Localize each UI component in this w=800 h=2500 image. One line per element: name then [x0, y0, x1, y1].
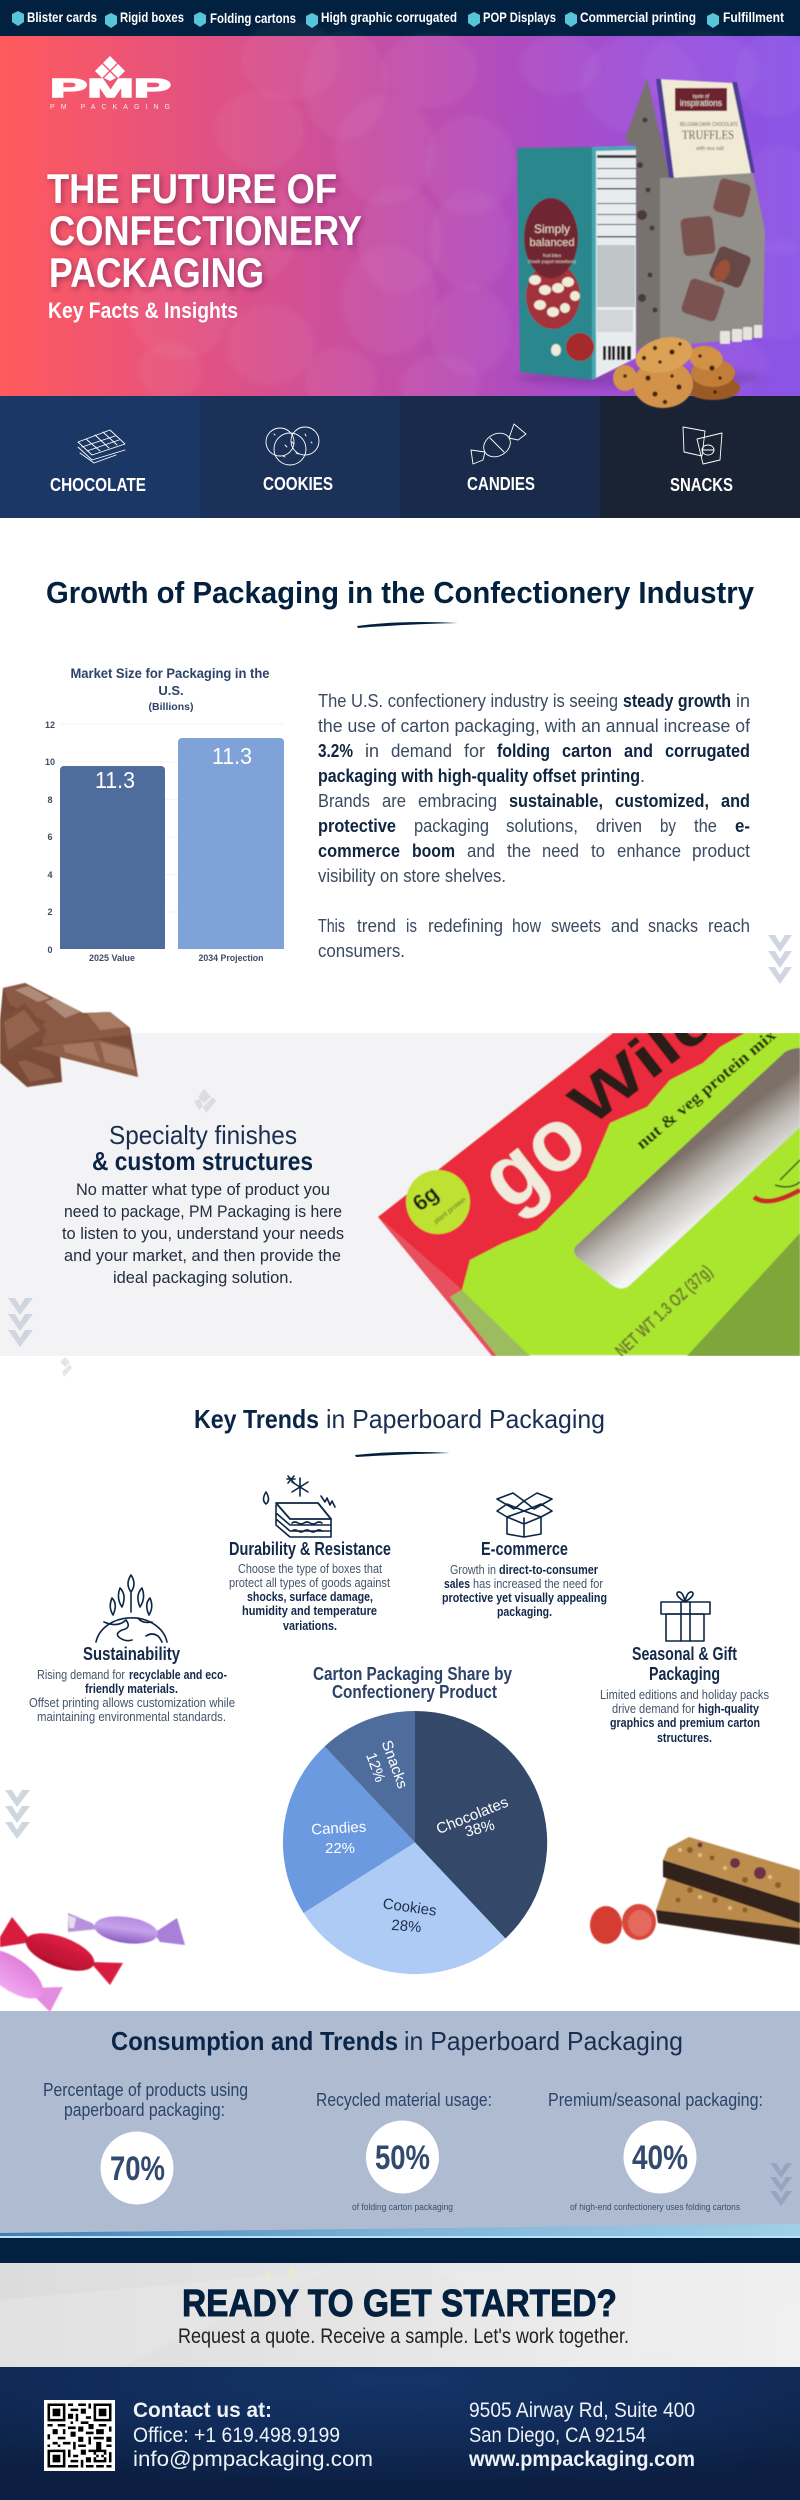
- hero background: [0, 20, 800, 415]
- truffles box: with sea salt: [696, 146, 724, 152]
- chart title: (Billions): [149, 701, 193, 713]
- cta heading: READY TO GET STARTED?: [182, 2283, 617, 2325]
- growth paragraph: redefining: [428, 916, 503, 936]
- swoosh divider: [0, 2224, 800, 2263]
- simply balanced box: Simply: [534, 222, 570, 236]
- bar labels: [89, 953, 264, 963]
- e-commerce copy: [442, 1562, 607, 1619]
- product image: go wild box: 6g: [408, 1180, 443, 1216]
- bar labels: 2025 Value: [89, 953, 135, 963]
- slice: cookies 28%: Cookies: [382, 1895, 438, 1920]
- sustainability copy: Offset printing allows customization while: [29, 1695, 235, 1710]
- trend: sustainability: [29, 1575, 235, 1724]
- growth paragraph: This: [318, 916, 345, 936]
- sustainability copy: friendly materials.: [85, 1681, 178, 1696]
- truffles box: TRUFFLES: [682, 127, 734, 142]
- service: rigid boxes: Rigid boxes: [120, 9, 184, 25]
- service: commercial printing: [565, 9, 696, 27]
- heading: specialty finishes: [92, 1120, 313, 1176]
- slice: candies 22%: [283, 1746, 415, 1913]
- service: blister cards: [12, 9, 97, 26]
- hero title: [47, 165, 362, 296]
- growth paragraph: the: [507, 841, 531, 861]
- service: high graphic corrugated: High graphic corrugated: [321, 9, 457, 25]
- service: POP displays: POP Displays: [483, 9, 556, 25]
- sustainability copy: maintaining environmental standards.: [37, 1709, 226, 1724]
- axis labels: 4: [47, 870, 53, 880]
- stat: 70%: paperboard packaging:: [64, 2100, 225, 2120]
- tile: candies: [400, 396, 600, 518]
- slice: candies 22%: Candies: [311, 1819, 367, 1838]
- panel: consumption and trends: [0, 2011, 800, 2237]
- e-commerce copy: has increased the need for: [473, 1576, 604, 1591]
- axis labels: 8: [47, 795, 53, 805]
- growth paragraph: Brands: [318, 791, 370, 811]
- bar: 2034 projection: [178, 738, 284, 949]
- simply balanced box: [517, 146, 636, 380]
- growth paragraph: product: [692, 841, 750, 861]
- growth paragraph: demand: [391, 741, 452, 761]
- durability copy: humidity and temperature: [242, 1603, 377, 1618]
- growth paragraph: the use of carton packaging, with an annual increase of: [318, 716, 751, 736]
- axis labels: 10: [45, 757, 55, 767]
- growth paragraph: sweets: [551, 916, 601, 936]
- paragraph: specialty finishes: [62, 1180, 344, 1287]
- chevrons: specialty section: [8, 1298, 33, 1347]
- product image: go wild box: NET WT 1.3 OZ (37g): [611, 1261, 716, 1361]
- truffles box: inspirations: [680, 98, 722, 108]
- growth paragraph: steady growth: [623, 691, 731, 711]
- bar: 2025 value: [60, 766, 165, 949]
- e-commerce copy: protective yet visually appealing: [442, 1590, 607, 1605]
- section heading: key trends: Key Trends: [194, 1404, 319, 1434]
- faint diamond mark: [60, 1357, 72, 1377]
- service: fulfillment: Fulfillment: [723, 9, 784, 25]
- durability copy: [229, 1561, 390, 1633]
- section heading: growth of packaging: [46, 575, 755, 628]
- growth paragraph: [318, 691, 751, 961]
- hero subtitle: Key Facts & Insights: [48, 298, 238, 323]
- chevrons: consumption section: [770, 2163, 792, 2206]
- trend: e-commerce: [442, 1493, 607, 1619]
- contact details: [133, 2399, 373, 2471]
- growth paragraph: visibility on store shelves.: [318, 866, 506, 886]
- heading: consumption and trends: in Paperboard Packaging: [404, 2026, 683, 2056]
- chevrons: trends section: [5, 1790, 30, 1839]
- truffles box: BELGIAN DARK CHOCOLATE: [680, 122, 739, 128]
- chart title: Market Size for Packaging in the: [70, 665, 270, 681]
- durability copy: variations.: [283, 1618, 337, 1633]
- product image: go wild box: go: [461, 1086, 604, 1228]
- axis labels: [45, 720, 55, 955]
- seasonal copy: structures.: [657, 1730, 712, 1745]
- slice: snacks 12%: [325, 1711, 415, 1842]
- paragraph: specialty finishes: No matter what type of product you: [76, 1180, 330, 1199]
- cta subheading: Request a quote. Receive a sample. Let's work together.: [178, 2325, 629, 2348]
- durability copy: protect all types of goods against: [229, 1575, 390, 1590]
- hero title: THE FUTURE OF: [47, 165, 337, 212]
- e-commerce copy: sales: [444, 1576, 470, 1591]
- seasonal copy: [600, 1687, 769, 1745]
- growth paragraph: snacks: [648, 916, 698, 936]
- chart title: [70, 665, 270, 713]
- growth paragraph: embracing: [418, 791, 497, 811]
- seasonal copy: drive demand for: [612, 1701, 696, 1716]
- section heading: growth of packaging: Growth of Packaging in the Confectionery Industry: [46, 575, 755, 610]
- slice: chocolates 38%: Chocolates: [434, 1794, 511, 1838]
- tile: snacks: SNACKS: [670, 475, 733, 495]
- footer: [0, 2367, 800, 2500]
- simply balanced box: balanced: [530, 237, 574, 249]
- service: fulfillment: [707, 9, 784, 28]
- stat: 50%: of folding carton packaging: [352, 2202, 453, 2213]
- growth paragraph: need: [542, 841, 579, 861]
- sustainability copy: [29, 1667, 235, 1724]
- growth paragraph: consumers.: [318, 941, 405, 961]
- heading: specialty finishes: Specialty finishes: [109, 1120, 297, 1150]
- category tiles: [0, 396, 800, 518]
- diamond mark: [194, 1089, 216, 1113]
- stat: 70%: Percentage of products using: [43, 2080, 248, 2100]
- trend: durability and resistance: [229, 1476, 391, 1633]
- slice: snacks 12%: 12%: [362, 1750, 388, 1784]
- service: POP displays: [468, 9, 556, 27]
- trend: e-commerce: E-commerce: [481, 1539, 568, 1559]
- seasonal copy: graphics and premium carton: [610, 1715, 760, 1730]
- growth paragraph: reach: [708, 916, 750, 936]
- paragraph: specialty finishes: ideal packaging solution.: [113, 1268, 293, 1287]
- heading: consumption and trends: Consumption and Trends: [111, 2026, 398, 2056]
- growth paragraph: in: [365, 741, 379, 761]
- tile: cookies: COOKIES: [263, 474, 333, 494]
- heading: specialty finishes: & custom structures: [92, 1146, 313, 1176]
- axis labels: 12: [45, 720, 55, 730]
- e-commerce copy: packaging.: [497, 1604, 552, 1619]
- stat: 50%: Recycled material usage:: [316, 2090, 492, 2110]
- image: chocolate pieces: [0, 983, 138, 1087]
- truffles box: [625, 78, 765, 348]
- growth paragraph: sustainable,: [509, 791, 603, 811]
- contact details: Contact us at:: [133, 2399, 272, 2422]
- stat: 40%: 40%: [632, 2139, 688, 2177]
- growth paragraph: trend: [357, 916, 396, 936]
- seasonal copy: Limited editions and holiday packs: [600, 1687, 769, 1702]
- chart title: U.S.: [158, 683, 184, 698]
- slice: candies 22%: 22%: [325, 1840, 355, 1857]
- service: commercial printing: Commercial printing: [580, 9, 696, 25]
- bar labels: 2034 Projection: [198, 953, 264, 963]
- product image: go wild box: plant protein: [433, 1196, 468, 1226]
- hero title: CONFECTIONERY: [49, 207, 362, 254]
- axis labels: 2: [47, 907, 53, 917]
- icon: stacked board with snowflake: [264, 1476, 335, 1537]
- tile: cookies: [200, 396, 400, 518]
- QR code: [44, 2400, 115, 2471]
- growth paragraph: carton: [562, 741, 612, 761]
- growth paragraph: for: [464, 741, 485, 761]
- growth paragraph: driven: [596, 816, 642, 836]
- growth paragraph: and: [611, 916, 639, 936]
- pie title: [313, 1664, 512, 1702]
- product image: go wild box: [377, 1033, 800, 1356]
- panel: specialty finishes: [0, 1033, 800, 1356]
- growth paragraph: to: [591, 841, 605, 861]
- paragraph: specialty finishes: need to package, PM Packaging is here: [64, 1202, 342, 1221]
- service: rigid boxes: [105, 9, 184, 28]
- product image: go wild box: Wild: [557, 981, 732, 1138]
- section heading: key trends: in Paperboard Packaging: [326, 1404, 605, 1434]
- image: wrapped candies: [0, 1913, 185, 2012]
- address: [468, 2399, 695, 2471]
- bar: 2025 value: 11.3: [95, 767, 135, 793]
- trend: durability and resistance: Durability & Resistance: [229, 1539, 391, 1559]
- growth paragraph: e-: [735, 816, 750, 836]
- growth paragraph: by: [660, 816, 676, 836]
- paragraph: specialty finishes: and your market, and then provide the: [64, 1246, 341, 1265]
- icon: plant on globe: [96, 1575, 167, 1642]
- bar: 2034 projection: 11.3: [212, 743, 252, 769]
- contact details: info@pmpackaging.com: [133, 2448, 373, 2471]
- hero logo: PM Packaging: [50, 56, 171, 111]
- pie chart: carton packaging share: [283, 1664, 547, 1974]
- growth paragraph: corrugated: [665, 741, 750, 761]
- trend: seasonal and gift packaging: Packaging: [649, 1664, 720, 1684]
- tile: candies: CANDIES: [467, 474, 535, 494]
- stat: 70%: [43, 2080, 248, 2204]
- sustainability copy: recyclable and eco-: [129, 1667, 227, 1682]
- truffles box: taste of: [693, 94, 710, 100]
- growth paragraph: and: [467, 841, 495, 861]
- service: folding cartons: [194, 10, 296, 27]
- tile: chocolate: CHOCOLATE: [50, 475, 146, 495]
- product image: go wild box: nut & veg protein mix: [632, 1025, 780, 1153]
- axis labels: 0: [47, 945, 53, 955]
- stat: 70%: 70%: [110, 2150, 165, 2188]
- growth paragraph: customized,: [615, 791, 709, 811]
- tile: chocolate: [0, 396, 200, 518]
- stat: 50%: [316, 2090, 492, 2213]
- slice: cookies 28%: 28%: [391, 1917, 422, 1936]
- address: www.pmpackaging.com: [468, 2448, 695, 2471]
- growth paragraph: are: [382, 791, 406, 811]
- slice: snacks 12%: Snacks: [378, 1738, 411, 1791]
- cookies: [613, 331, 740, 408]
- contact details: Office: +1 619.498.9199: [133, 2424, 340, 2447]
- slice: chocolates 38%: 38%: [463, 1817, 497, 1841]
- growth paragraph: packaging with high-quality offset printing: [318, 766, 640, 786]
- bar chart: market size: [45, 665, 284, 963]
- growth paragraph: boom: [412, 841, 455, 861]
- trend: sustainability: Sustainability: [83, 1644, 180, 1664]
- growth paragraph: how: [512, 916, 542, 936]
- growth paragraph: in: [736, 691, 750, 711]
- growth paragraph: is: [406, 916, 417, 936]
- axis labels: 6: [47, 832, 53, 842]
- tile: snacks: [600, 396, 800, 518]
- stat: 40%: [548, 2090, 763, 2213]
- simply balanced box: Greek yogurt strawberry: [528, 259, 577, 264]
- slice: chocolates 38%: [415, 1711, 547, 1938]
- paragraph: specialty finishes: to listen to you, understand your needs: [62, 1224, 344, 1243]
- durability copy: shocks, surface damage,: [247, 1589, 373, 1604]
- durability copy: Choose the type of boxes that: [238, 1561, 382, 1576]
- growth paragraph: commerce: [318, 841, 400, 861]
- section heading: key trends: [194, 1404, 605, 1457]
- icon: gift box: [661, 1592, 710, 1641]
- service: folding cartons: Folding cartons: [210, 10, 296, 26]
- address: San Diego, CA 92154: [469, 2424, 646, 2447]
- service: high graphic corrugated: [306, 9, 457, 28]
- hero logo: PM Packaging: PMP: [50, 73, 171, 103]
- growth paragraph: folding: [497, 741, 550, 761]
- e-commerce copy: Growth in: [450, 1562, 496, 1577]
- product image: boxes and cookies: [515, 78, 765, 408]
- growth paragraph: .: [640, 766, 645, 786]
- chevrons: growth section: [768, 935, 792, 984]
- growth paragraph: packaging: [414, 816, 489, 836]
- growth paragraph: the: [694, 816, 717, 836]
- growth paragraph: and: [721, 791, 750, 811]
- simply balanced box: fruit bites: [543, 253, 562, 258]
- growth paragraph: protective: [318, 816, 396, 836]
- trend: seasonal and gift packaging: [600, 1592, 769, 1745]
- pie title: Confectionery Product: [332, 1682, 497, 1702]
- stat: 40%: Premium/seasonal packaging:: [548, 2090, 763, 2110]
- heading: consumption and trends: [111, 2026, 683, 2056]
- hero title: PACKAGING: [49, 249, 264, 296]
- stat: 50%: 50%: [375, 2139, 430, 2177]
- image: granola bars and strawberries: [590, 1837, 800, 1945]
- growth paragraph: and: [624, 741, 653, 761]
- sustainability copy: Rising demand for: [37, 1667, 126, 1682]
- growth paragraph: enhance: [617, 841, 681, 861]
- hero logo: PM Packaging: PM PACKAGING: [50, 104, 170, 111]
- seasonal copy: high-quality: [698, 1701, 760, 1716]
- growth paragraph: solutions,: [506, 816, 578, 836]
- pie title: Carton Packaging Share by: [313, 1664, 512, 1684]
- growth paragraph: 3.2%: [318, 741, 353, 761]
- slice: cookies 28%: [304, 1842, 505, 1974]
- icon: open box: [497, 1493, 552, 1537]
- stat: 40%: of high-end confectionery uses folding cartons: [570, 2202, 740, 2213]
- e-commerce copy: direct-to-consumer: [499, 1562, 598, 1577]
- top services bar: [0, 0, 800, 36]
- trend: seasonal and gift packaging: Seasonal & Gift: [632, 1644, 737, 1664]
- call to action: [0, 2263, 800, 2367]
- address: 9505 Airway Rd, Suite 400: [469, 2399, 695, 2422]
- growth paragraph: The U.S. confectionery industry is seeing: [318, 691, 618, 711]
- service: blister cards: Blister cards: [27, 9, 97, 25]
